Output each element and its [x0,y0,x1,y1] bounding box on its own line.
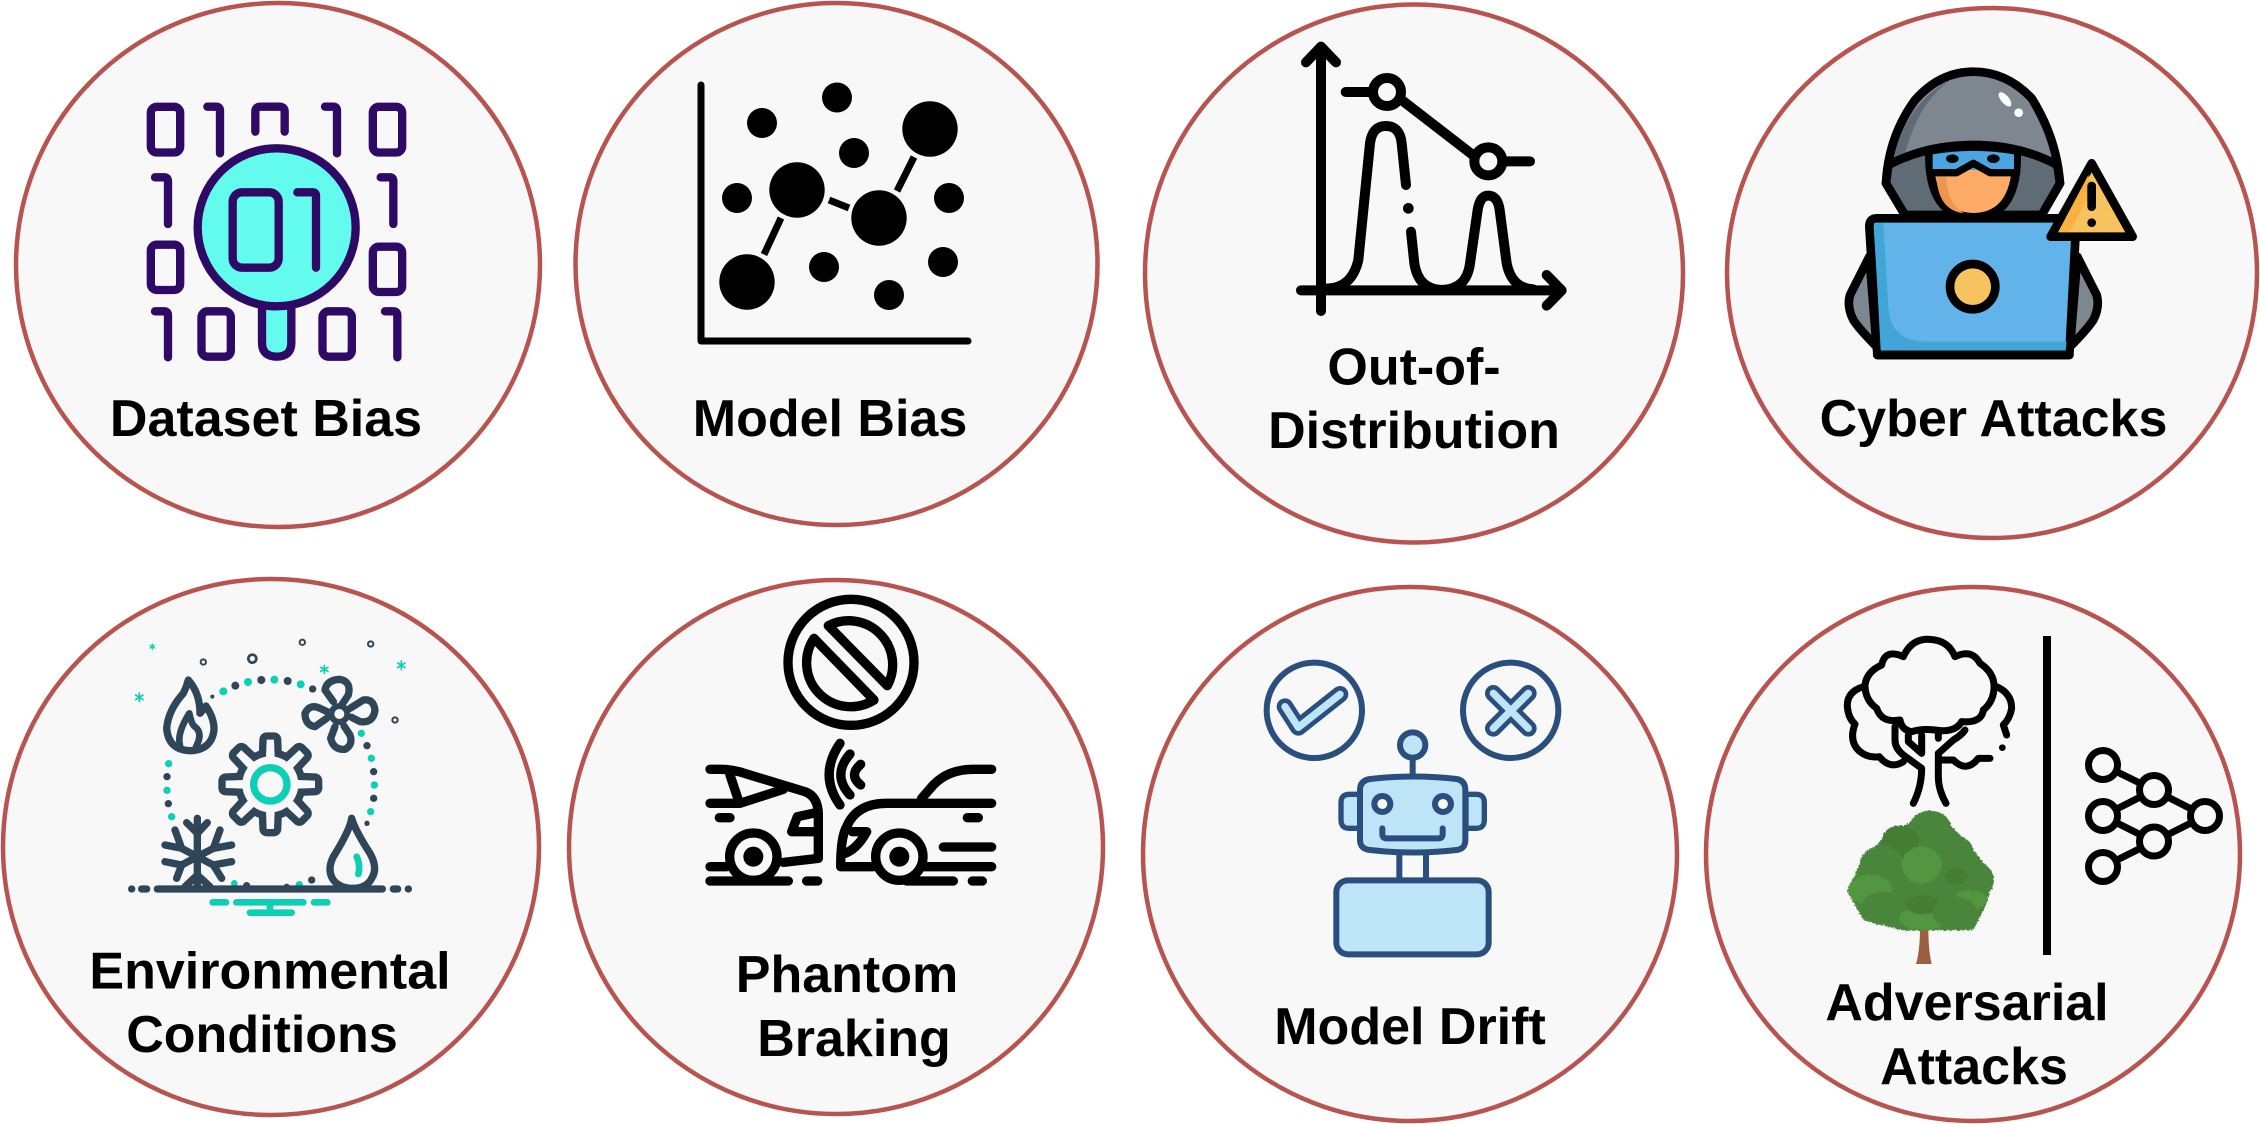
label [736,946,958,1068]
panel: Model Bias [576,3,1098,525]
panel circle [569,580,1103,1114]
panel: Environmental Conditions [3,579,539,1115]
panel circle [1145,4,1683,542]
label: Phantom [736,946,958,1004]
label: Adversarial [1825,974,2109,1032]
icon: distribution chart with slider [1301,47,1562,311]
icon: outlined tree [1847,639,2012,803]
label [1268,338,1560,460]
label: Distribution [1268,402,1560,460]
panel circle [3,579,539,1115]
icon: green tree [1847,811,1994,964]
label [1825,974,2109,1096]
label: Environmental [89,942,451,1000]
panel: Phantom Braking [569,580,1103,1114]
label: Cyber Attacks [1820,390,2167,448]
icon: scatter plot with linked nodes [701,82,968,341]
label: Braking [757,1010,951,1068]
panel: Out-of-Distribution [1145,4,1683,542]
panel circle [16,3,540,527]
label: Dataset Bias [110,390,422,448]
icon: binary digits with magnifier [151,107,402,357]
panel: Adversarial Attacks [1706,587,2240,1121]
icon: two cars colliding with signal waves [710,743,992,881]
panel: Dataset Bias [16,3,540,527]
icon: neural network [2088,750,2220,882]
label: Model Drift [1274,998,1546,1056]
panel circle [1143,587,1677,1121]
panel circle [1727,8,2257,538]
panel: Cyber Attacks [1727,8,2257,538]
label: Out-of- [1327,338,1501,396]
icon: robot with check and cross [1267,663,1558,954]
panel circle [576,3,1098,525]
label: Model Bias [693,390,967,448]
icon: gear surrounded by elements [132,640,408,913]
label: Attacks [1880,1038,2068,1096]
divider line [2043,636,2051,955]
panel circle [1706,587,2240,1121]
icon: hooded hacker at laptop with warning [1849,72,2133,355]
panel: Model Drift [1143,587,1677,1121]
label: Conditions [126,1006,398,1064]
icon: prohibition sign [788,599,914,725]
label [89,942,451,1064]
